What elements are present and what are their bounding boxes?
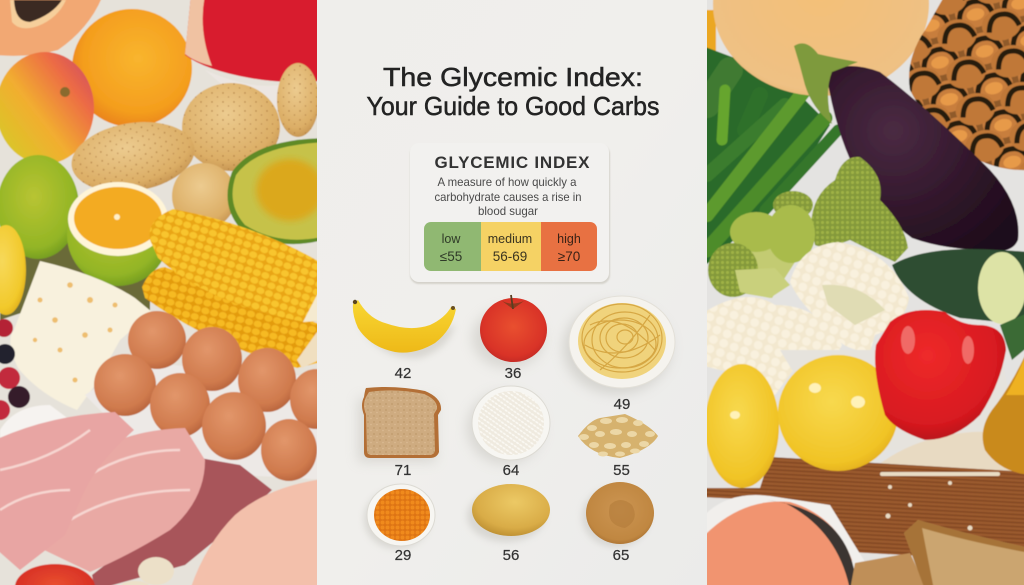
title	[366, 62, 660, 121]
white board	[780, 350, 1020, 450]
salmon plate	[700, 495, 870, 585]
eggs	[94, 311, 342, 481]
watermelon	[185, 0, 330, 82]
broccoli small	[708, 191, 815, 298]
papaya	[0, 0, 103, 56]
apple bottom	[15, 564, 95, 585]
lime	[0, 155, 79, 259]
scale: medium: medium	[488, 232, 532, 246]
food: apple	[472, 295, 547, 368]
orange half	[67, 182, 169, 286]
corn upper	[149, 209, 330, 322]
yellow fruit left	[705, 364, 779, 488]
panel: left food photo	[0, 0, 342, 585]
berries	[0, 319, 30, 420]
mango	[0, 52, 94, 164]
white plate	[85, 362, 330, 480]
panel: glycemic index card	[410, 143, 610, 284]
dark pork	[92, 458, 272, 585]
label: 55: 55	[613, 462, 630, 479]
card description	[434, 175, 582, 218]
cauliflower lower	[700, 297, 842, 395]
cucumber	[892, 249, 1024, 325]
yellow fruit center	[778, 355, 898, 471]
spaghetti board	[700, 457, 1024, 562]
cauliflower upper	[790, 242, 909, 352]
food: bread slice	[358, 387, 441, 462]
label: 71: 71	[395, 462, 411, 479]
oil bottle	[983, 345, 1024, 475]
plate edge	[205, 70, 280, 110]
pork chop right	[40, 428, 205, 572]
eggplant	[794, 43, 1018, 251]
card description: blood sugar	[478, 204, 538, 218]
potato top right	[277, 63, 319, 137]
salmon	[700, 500, 855, 585]
food: spaghetti plate	[563, 296, 675, 394]
card description: carbohydrate causes a rise in	[434, 190, 582, 204]
chicken	[192, 480, 317, 585]
label: 49: 49	[614, 396, 630, 413]
shadows between items	[0, 240, 150, 320]
food: oats pile	[578, 414, 658, 458]
cheese	[10, 261, 152, 410]
scale: high	[541, 222, 597, 271]
green onions	[707, 47, 842, 265]
label: 64: 64	[503, 462, 519, 479]
pineapple	[909, 0, 1024, 170]
potato center	[182, 83, 280, 171]
label: 65: 65	[613, 547, 629, 564]
mushrooms	[121, 557, 174, 585]
large orange	[72, 9, 192, 127]
scale: low	[424, 222, 481, 271]
scale: medium	[481, 222, 541, 271]
title: The Glycemic Index:	[383, 62, 643, 92]
card description: A measure of how quickly a	[438, 175, 577, 189]
label: 56: 56	[503, 547, 519, 564]
scale: high: ≥70	[558, 249, 580, 264]
food: rice bowl	[467, 386, 550, 464]
scale: low: ≤55	[440, 249, 462, 264]
white dish left	[0, 405, 66, 438]
scale: medium: 56-69	[493, 249, 527, 264]
oats pile	[874, 432, 1012, 475]
bread lower	[850, 553, 927, 585]
panel: center background	[317, 0, 707, 585]
label: 42: 42	[395, 365, 411, 382]
food: cookie	[582, 482, 654, 547]
broccoli main	[811, 157, 908, 262]
scale: high: high	[557, 232, 581, 246]
orange slice edge	[707, 9, 717, 52]
scale: low: low	[442, 232, 461, 246]
food: banana	[353, 300, 456, 358]
card heading: GLYCEMIC INDEX	[434, 153, 590, 172]
label: 29: 29	[395, 547, 411, 564]
red pepper	[875, 310, 1006, 440]
potato lower	[172, 162, 232, 222]
oat crumbs	[880, 472, 1000, 530]
corn lower	[142, 267, 330, 368]
pork chop left	[0, 412, 134, 570]
avocado	[227, 138, 317, 245]
potato long	[71, 121, 194, 190]
food: lentil bowl	[364, 484, 435, 549]
title: Your Guide to Good Carbs	[366, 91, 660, 121]
green stem behind pepper	[1000, 312, 1024, 360]
corn tip cream	[296, 332, 317, 368]
melon	[713, 0, 929, 96]
label: 36: 36	[505, 365, 521, 382]
panel: right food photo	[695, 0, 1024, 585]
lemon	[0, 225, 26, 315]
bread upper	[904, 520, 1024, 585]
food: potato	[467, 484, 550, 542]
